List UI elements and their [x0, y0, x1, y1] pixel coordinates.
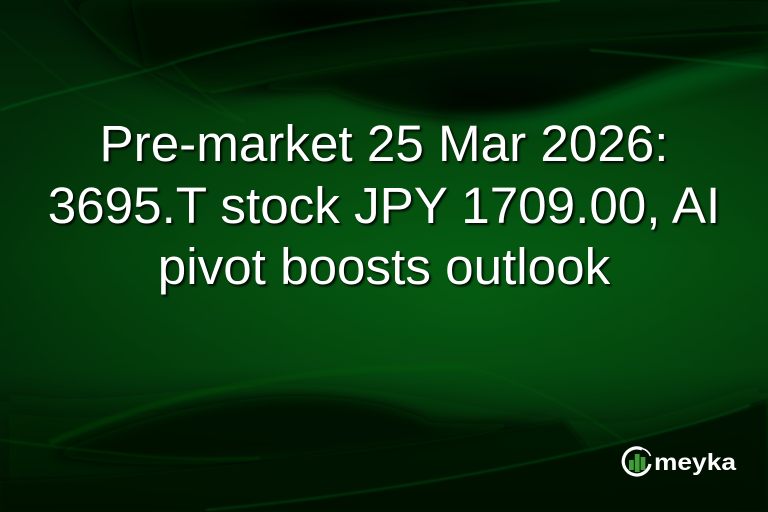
top lines — [0, 0, 768, 122]
logo wordmark: meyka — [654, 449, 736, 475]
icon: logo ring with bars — [623, 448, 650, 475]
title: Pre-market 25 Mar 2026: — [100, 115, 668, 172]
title: pivot boosts outlook — [158, 238, 610, 295]
bright band top right — [440, 56, 768, 130]
bottom darkness — [0, 390, 768, 512]
title — [48, 115, 720, 298]
bottom dark lens — [50, 396, 560, 464]
logo: meyka — [622, 446, 736, 477]
top darkness — [60, 0, 768, 95]
title: 3695.T stock JPY 1709.00, AI — [48, 176, 720, 234]
bottom lines — [0, 367, 750, 510]
